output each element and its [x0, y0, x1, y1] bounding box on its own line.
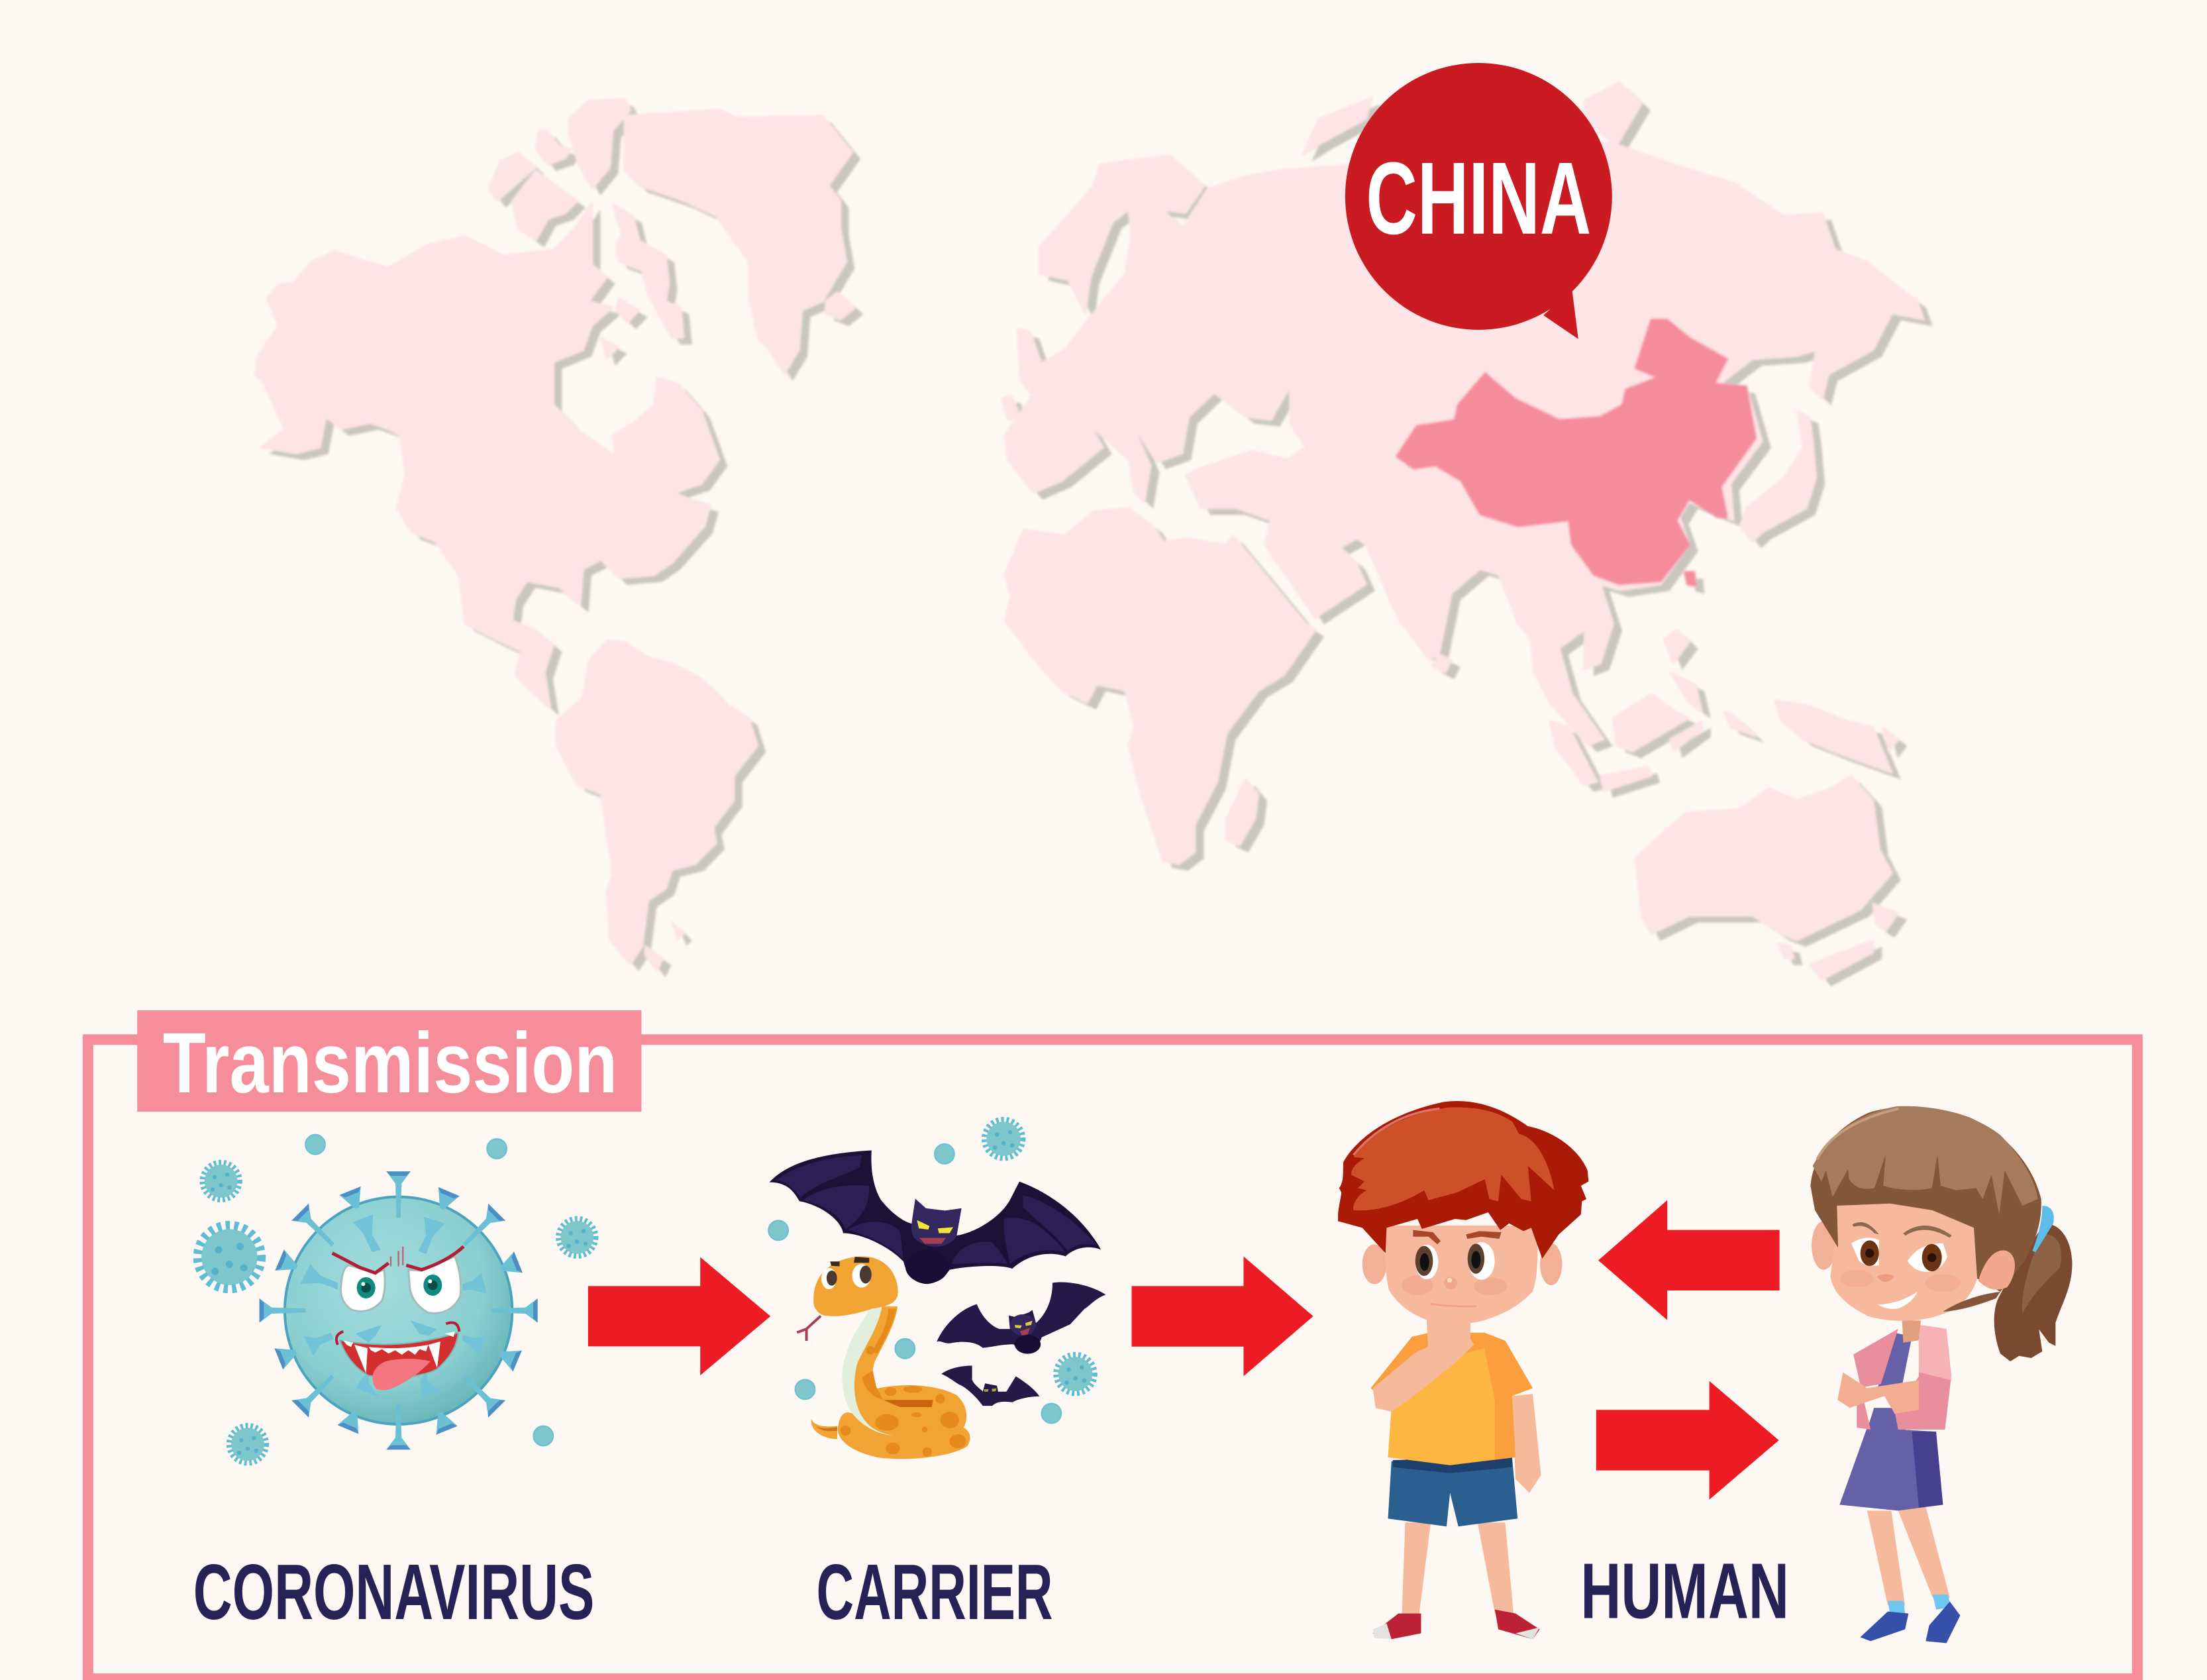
icon: carrier bats and snake with virus particles — [768, 1120, 1105, 1459]
label: HUMAN: HUMAN — [1580, 1548, 1789, 1636]
arrow: girl to boy — [1598, 1200, 1780, 1320]
label: CARRIER: CARRIER — [816, 1548, 1053, 1636]
arrow: boy to girl — [1596, 1381, 1779, 1500]
arrow: coronavirus to carrier — [588, 1257, 770, 1375]
icon: large bat — [770, 1150, 1101, 1284]
icon: girl character — [1810, 1106, 2072, 1643]
map: Eurasia, Africa and Oceania — [1001, 82, 1933, 986]
callout: China speech bubble — [1345, 63, 1612, 339]
icon: coronavirus character with small virus particles — [197, 1135, 596, 1463]
panel border — [88, 1039, 2137, 1679]
callout: China speech bubble: CHINA — [1366, 141, 1591, 256]
world map — [255, 82, 1933, 986]
panel: transmission — [88, 1010, 2137, 1679]
icon: boy character — [1338, 1101, 1588, 1639]
arrow: carrier to human — [1131, 1257, 1313, 1376]
label: CORONAVIRUS: CORONAVIRUS — [193, 1548, 594, 1636]
map: Americas and Greenland — [255, 99, 864, 977]
icon: snake — [797, 1256, 970, 1459]
icon: medium bat — [937, 1283, 1105, 1354]
heading: Transmission: Transmission — [163, 1016, 617, 1111]
icon: small bat — [941, 1365, 1039, 1406]
map: China highlighted — [1396, 319, 1756, 586]
